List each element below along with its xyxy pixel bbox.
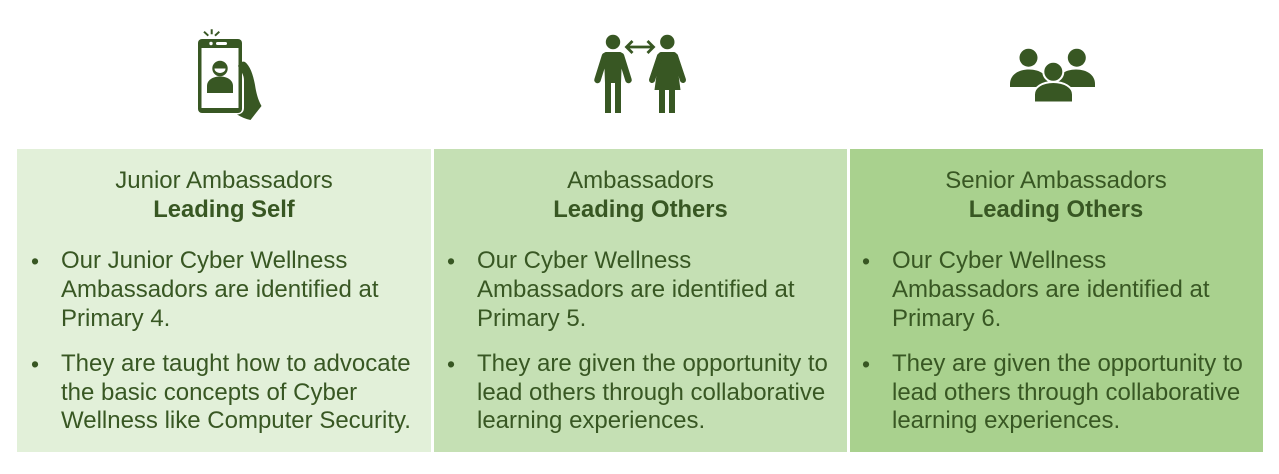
icon: group of three people xyxy=(1010,48,1095,102)
icon: man and woman with double arrow xyxy=(594,34,686,113)
panel: Junior Ambassadors xyxy=(17,149,431,452)
icon: hand holding phone with selfie xyxy=(198,29,262,120)
text block: bullet two: learning experiences. xyxy=(892,407,1120,434)
text block: bullet two: Wellness like Computer Security. xyxy=(61,407,411,434)
heading: Senior Ambassadors, Leading Others: Leading Others xyxy=(969,196,1143,223)
text block: bullet two: They are given the opportunity to xyxy=(477,350,828,377)
text block: bullet two: They are given the opportunity to xyxy=(892,350,1243,377)
panel: Senior Ambassadors xyxy=(850,149,1263,452)
panel: Ambassadors xyxy=(434,149,847,452)
text block: bullet one: Our Junior Cyber Wellness xyxy=(61,247,347,274)
text block: bullet two xyxy=(31,350,411,434)
text block: bullet two: lead others through collaborative xyxy=(892,378,1240,406)
text block: bullet two: • xyxy=(31,351,39,377)
text block: bullet two: • xyxy=(447,351,455,377)
heading: Ambassadors, Leading Others xyxy=(553,167,728,223)
heading: Senior Ambassadors, Leading Others xyxy=(945,167,1167,223)
heading: Junior Ambassadors, Leading Self: Leading Self xyxy=(153,196,295,223)
text block: bullet one xyxy=(862,247,1210,332)
text block: bullet one: Ambassadors are identified at xyxy=(892,276,1210,303)
heading: Senior Ambassadors, Leading Others: Senior Ambassadors xyxy=(945,167,1167,194)
heading: Junior Ambassadors, Leading Self: Junior Ambassadors xyxy=(115,167,333,194)
text block: bullet two xyxy=(862,350,1243,434)
text block: bullet one: Our Cyber Wellness xyxy=(477,247,691,274)
text block: bullet two: lead others through collaborative xyxy=(477,378,825,406)
heading: Junior Ambassadors, Leading Self xyxy=(115,167,333,223)
text block: bullet one: • xyxy=(862,248,870,274)
text block: bullet one: • xyxy=(447,248,455,274)
text block: bullet one: Ambassadors are identified at xyxy=(61,276,379,303)
text block: bullet one: • xyxy=(31,248,39,274)
heading: Ambassadors, Leading Others: Ambassadors xyxy=(567,167,714,194)
text block: bullet one xyxy=(447,247,795,332)
text block: bullet two: • xyxy=(862,351,870,377)
text block: bullet two: They are taught how to advocate xyxy=(61,350,411,377)
text block: bullet one: Our Cyber Wellness xyxy=(892,247,1106,274)
text block: bullet two: the basic concepts of Cyber xyxy=(61,378,357,406)
text block: bullet two xyxy=(447,350,828,434)
text block: bullet one: Primary 5. xyxy=(477,305,586,332)
text block: bullet two: learning experiences. xyxy=(477,407,705,434)
heading: Ambassadors, Leading Others: Leading Others xyxy=(553,196,728,223)
text block: bullet one xyxy=(31,247,379,332)
text block: bullet one: Ambassadors are identified at xyxy=(477,276,795,303)
text block: bullet one: Primary 4. xyxy=(61,305,170,332)
text block: bullet one: Primary 6. xyxy=(892,305,1001,332)
